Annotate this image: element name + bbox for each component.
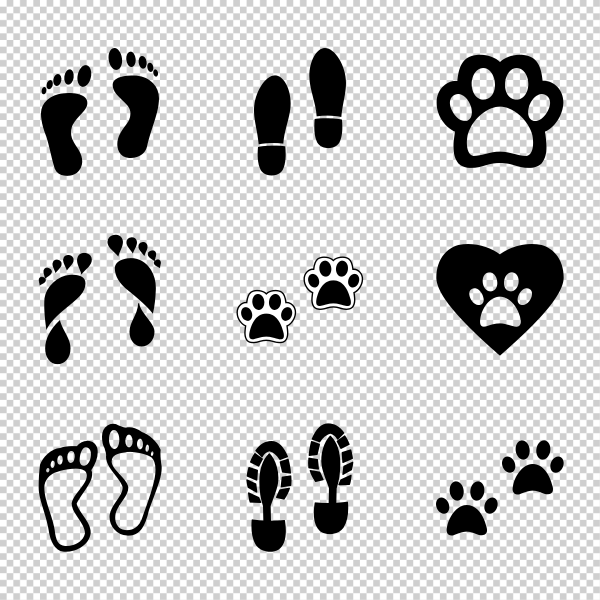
icon: bare footprints with teardrop heels [37, 234, 163, 364]
icon: shoe sole prints [254, 48, 346, 175]
icon: outlined bare footprints [39, 424, 161, 551]
icon: two paws with white halo [237, 257, 362, 343]
icon: heart with paw cut-out [436, 244, 564, 356]
icon: bare footprints solid [41, 48, 159, 176]
icon: boot tread prints [247, 424, 353, 551]
icon: large outlined paw [437, 55, 563, 168]
icon: two solid paw prints [434, 439, 566, 536]
